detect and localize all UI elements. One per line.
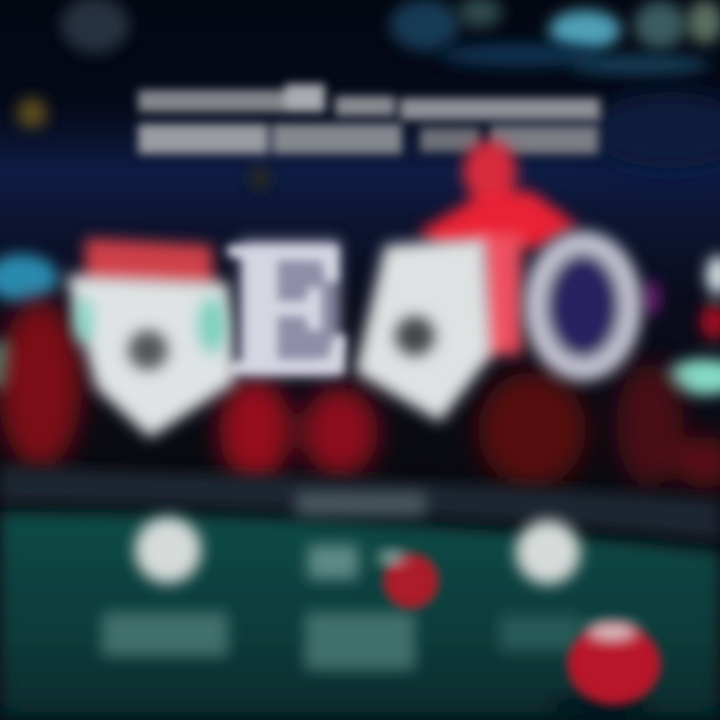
card 2 <box>355 238 492 422</box>
ball body <box>568 624 660 704</box>
caption 1 <box>102 612 228 656</box>
E glyph: E <box>227 204 353 414</box>
card 1 centre pip <box>128 330 168 370</box>
red ball small <box>378 551 438 608</box>
icon: gold coin <box>17 98 47 128</box>
left side decorations <box>0 254 58 389</box>
icon: chip 1 <box>135 517 201 583</box>
column 3 <box>500 520 580 651</box>
card 1 mint glow left <box>74 296 94 344</box>
card 2 centre pip <box>395 316 435 356</box>
card 1 body <box>66 275 236 438</box>
card 1 red top <box>85 238 214 292</box>
card 1 <box>66 238 236 438</box>
icon: chip 2 <box>308 545 358 579</box>
bottom heading block <box>296 492 426 516</box>
column 1 <box>102 517 228 656</box>
ball highlight <box>586 622 638 642</box>
column 2 <box>305 545 415 670</box>
letter O <box>535 242 631 370</box>
top decorative lights <box>61 0 720 168</box>
red ribbon <box>418 140 578 355</box>
title <box>138 84 600 154</box>
caption 3 <box>500 615 580 651</box>
green felt <box>0 512 720 720</box>
ball highlight <box>378 551 406 565</box>
ball body <box>384 554 438 608</box>
ball shadow <box>550 696 650 720</box>
red ball large <box>550 622 660 720</box>
card 1 mint glow right <box>198 297 226 353</box>
icon: chip 3 <box>516 520 580 584</box>
table edge <box>0 466 720 540</box>
ribbon bow <box>418 190 578 248</box>
letter E <box>227 204 353 414</box>
small gold mark <box>250 168 270 188</box>
caption 2 <box>305 612 415 670</box>
O ring <box>535 242 631 370</box>
E backing <box>240 240 340 375</box>
ribbon tail <box>480 235 522 355</box>
dark red curtains <box>0 300 720 488</box>
right side decorations <box>645 255 720 395</box>
card 2 body <box>355 238 492 422</box>
ribbon knot <box>463 140 517 204</box>
